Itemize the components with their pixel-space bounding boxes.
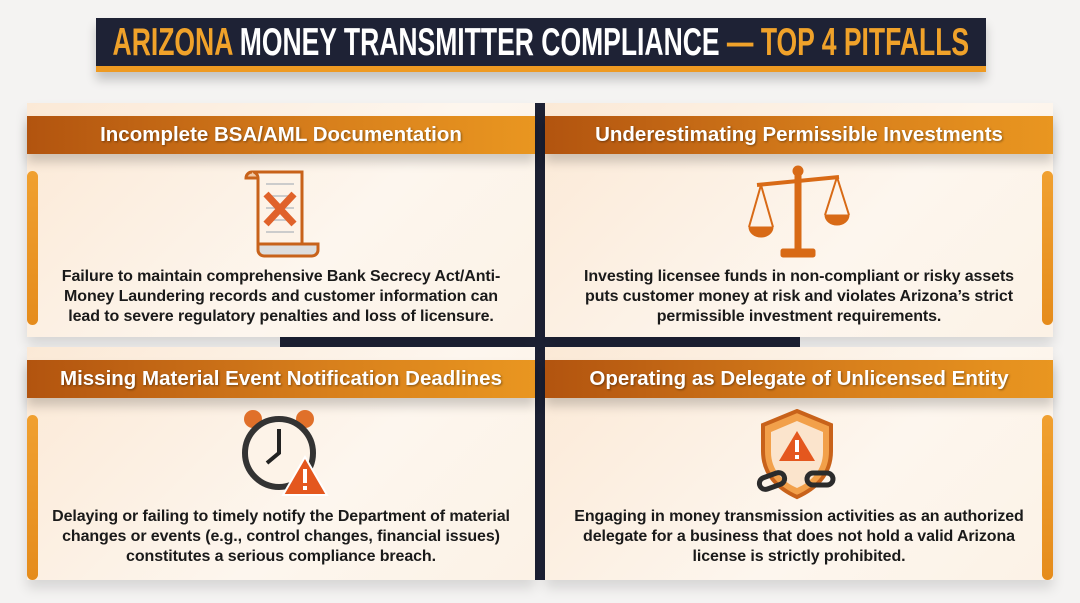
body text: lead to severe regulatory penalties and loss of licensure.	[68, 308, 494, 325]
body text: constitutes a serious compliance breach.	[126, 548, 436, 565]
body text: Failure to maintain comprehensive Bank Secrecy Act/Anti-	[62, 268, 500, 285]
heading: Missing Material Event Notification Deadlines	[60, 367, 502, 390]
divider horizontal	[280, 337, 800, 347]
accent	[1042, 415, 1053, 580]
body text: Engaging in money transmission activities as an authorized	[574, 508, 1024, 525]
body text	[52, 508, 510, 565]
body text: puts customer money at risk and violates Arizona’s strict	[585, 288, 1013, 305]
accent	[27, 171, 38, 325]
heading	[545, 360, 1053, 398]
heading	[27, 360, 535, 398]
body text: Money Laundering records and customer information can	[64, 288, 498, 305]
icon: shield broken chain	[756, 409, 836, 500]
panel: delegate of unlicensed entity	[545, 347, 1053, 580]
heading	[545, 116, 1053, 154]
heading: Incomplete BSA/AML Documentation	[100, 123, 462, 146]
heading	[27, 116, 535, 154]
body text: permissible investment requirements.	[657, 308, 941, 325]
body text	[584, 268, 1014, 325]
panel: material event	[27, 347, 535, 580]
panel: BSA/AML	[27, 103, 535, 337]
body text: delegate for a business that does not hold a valid Arizona	[583, 528, 1015, 545]
heading: Operating as Delegate of Unlicensed Entity	[589, 367, 1009, 390]
body text: Delaying or failing to timely notify the Department of material	[52, 508, 510, 525]
body text	[574, 508, 1024, 565]
accent	[1042, 171, 1053, 325]
icon: scales	[748, 166, 850, 258]
body text	[62, 268, 500, 325]
accent	[27, 415, 38, 580]
panel: permissible investments	[545, 103, 1053, 337]
icon: document with X	[244, 170, 320, 258]
title bar: ARIZONA MONEY TRANSMITTER COMPLIANCE — TOP 4 PITFALLS	[113, 21, 969, 64]
body text: Investing licensee funds in non-compliant or risky assets	[584, 268, 1014, 285]
body text: license is strictly prohibited.	[693, 548, 905, 565]
heading: Underestimating Permissible Investments	[595, 123, 1003, 146]
divider vertical	[535, 103, 545, 580]
body text: changes or events (e.g., control changes, financial issues)	[62, 528, 500, 545]
icon: clock with warning	[242, 410, 328, 496]
